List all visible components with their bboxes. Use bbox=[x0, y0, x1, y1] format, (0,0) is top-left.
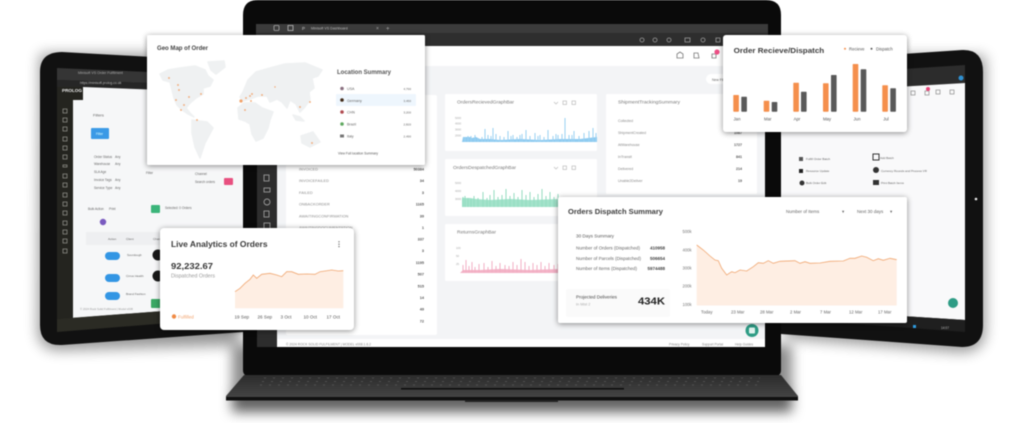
left tablet table: Client bbox=[126, 237, 134, 241]
month labels: Jan bbox=[734, 116, 741, 122]
location summary: CHN bbox=[347, 110, 355, 114]
left tablet logo: PROLOG bbox=[62, 88, 82, 93]
right tablet menu list bbox=[799, 154, 928, 186]
bar chart: dark series bbox=[741, 69, 896, 112]
panel: order statuses: FAILED bbox=[299, 191, 313, 195]
right tablet menu list: Bulk Order Edit bbox=[806, 181, 827, 185]
left tablet table bbox=[80, 219, 243, 311]
left tablet filter form: Invoice Tags bbox=[94, 178, 112, 182]
panel: returns graph: 25 bbox=[456, 262, 460, 266]
panel: orders dispatched graph: 5000 bbox=[455, 181, 462, 185]
line chart: dispatch: 200k bbox=[682, 284, 692, 288]
line chart: dispatch: 100k bbox=[682, 302, 692, 307]
month labels: Mar bbox=[764, 116, 772, 122]
laptop browser tab bar: × bbox=[376, 26, 379, 32]
dropdowns bbox=[786, 209, 893, 214]
line chart: dispatch: Today bbox=[701, 310, 713, 314]
panel: orders received graph: OrdersRecievedGraphBar bbox=[457, 100, 515, 104]
fulfilled legend: Fulfilled bbox=[178, 314, 194, 320]
laptop header icons bbox=[677, 49, 720, 58]
dropdowns: Number of Items bbox=[786, 209, 820, 214]
panel: order statuses: 3 bbox=[422, 249, 424, 253]
panel: shipment tracking summary: AtWarehouse bbox=[618, 143, 640, 147]
left tablet table: © 2024 Rock Solid Fulfilment | Model v008 bbox=[80, 307, 133, 311]
legend: Recieve bbox=[849, 46, 865, 51]
laptop footer: Support Portal bbox=[702, 342, 723, 346]
live chart dates: 10 Oct bbox=[304, 314, 318, 320]
panel: shipment tracking summary: ShipmentCreated bbox=[618, 131, 646, 135]
panel: shipment tracking summary: Unable2Deliver bbox=[618, 179, 643, 183]
location summary: 2,820 bbox=[403, 122, 411, 126]
panel: orders dispatched graph: 3000 bbox=[455, 197, 462, 201]
location summary: USA bbox=[347, 87, 355, 91]
legend bbox=[844, 46, 893, 51]
laptop bbox=[226, 0, 798, 402]
left tablet browser bars bbox=[57, 68, 243, 94]
left tablet table: Sourdough bbox=[127, 253, 142, 257]
right tablet screen bbox=[775, 83, 965, 320]
30 days summary: 506654 bbox=[650, 256, 665, 261]
reset button bbox=[224, 178, 233, 185]
panel: shipment tracking summary: Collected bbox=[618, 119, 633, 123]
right tablet header icons bbox=[911, 76, 964, 95]
fulfilled legend bbox=[172, 314, 194, 320]
panel: returns graph: ReturnsGraphBar bbox=[457, 230, 497, 234]
location summary: Brazil bbox=[347, 122, 356, 126]
panel: order statuses: 1 bbox=[422, 226, 424, 230]
left tablet filter form: SLA Age bbox=[94, 170, 106, 174]
location summary bbox=[336, 69, 416, 156]
month labels: May bbox=[823, 116, 832, 122]
location summary: Germany bbox=[347, 99, 362, 103]
panel: order statuses: 1195 bbox=[416, 261, 424, 265]
right tablet menu list: Resource Update bbox=[806, 169, 830, 173]
laptop footer: Help Guides bbox=[735, 342, 753, 346]
order chart title: Order Recieve/Dispatch bbox=[734, 46, 825, 55]
live chart dates: 3 Oct bbox=[280, 314, 292, 320]
left tablet filter form bbox=[88, 112, 233, 213]
dispatched orders value: Dispatched Orders bbox=[171, 274, 216, 280]
location summary: 4,790 bbox=[403, 87, 411, 91]
panel: orders dispatched graph: 4000 bbox=[455, 189, 462, 193]
laptop new filter pill: New Filter bbox=[712, 78, 728, 82]
right tablet taskbar: 14:07 bbox=[941, 326, 949, 330]
location summary: Italy bbox=[347, 134, 354, 138]
line chart: live orders bbox=[235, 270, 343, 308]
panel: order statuses: 1165 bbox=[416, 202, 424, 206]
panel: shipment tracking summary: 841 bbox=[736, 155, 742, 159]
location summary: 2,490 bbox=[403, 134, 411, 138]
month labels bbox=[734, 116, 889, 122]
line chart: dispatch: 500k bbox=[682, 229, 692, 234]
right tablet menu list: Currency Rounds and Process VR bbox=[881, 169, 928, 173]
30 days summary: Number of Items (Dispatched) bbox=[576, 266, 638, 271]
dropdowns: ▾ bbox=[890, 209, 893, 214]
panel: shipment tracking summary: 1727 bbox=[734, 143, 742, 147]
dispatched orders value: 92,232.67 bbox=[171, 261, 213, 271]
month labels: Jun bbox=[854, 116, 861, 122]
laptop footer: © 2024 ROCK SOLID FULFILMENT | MODEL v008.1.6.2 bbox=[286, 342, 371, 346]
panel: orders received graph: 4000 bbox=[455, 122, 462, 126]
dropdowns: Next 30 days bbox=[857, 209, 884, 214]
panel: shipment tracking summary: Delivered bbox=[618, 167, 633, 171]
laptop footer bbox=[286, 342, 753, 346]
line chart: dispatch: 400k bbox=[682, 248, 692, 252]
panel: orders received graph: 3000 bbox=[455, 128, 462, 132]
line chart: dispatch: 7 Mar bbox=[820, 310, 832, 314]
go button bbox=[151, 205, 160, 213]
right tablet camera dot bbox=[975, 198, 977, 200]
panel: orders received graph: 2000 bbox=[455, 134, 462, 138]
panel: order statuses: ONBACKORDER bbox=[299, 202, 330, 206]
left tablet browser bars: https://minisoft.prolog.co.uk bbox=[80, 81, 122, 85]
live chart dates bbox=[234, 314, 341, 320]
right tablet browser bars bbox=[781, 65, 965, 94]
world map bbox=[160, 61, 322, 158]
right tablet bbox=[775, 50, 983, 347]
line chart: dispatch: 28 Mar bbox=[760, 310, 774, 314]
line chart: dispatch: 12 Mar bbox=[849, 310, 863, 314]
panel: order statuses bbox=[286, 95, 437, 335]
projected deliveries bbox=[566, 289, 670, 317]
dispatch title: Orders Dispatch Summary bbox=[568, 207, 664, 216]
left tablet table: Brand Fashion bbox=[126, 292, 146, 296]
laptop chat button bbox=[746, 324, 758, 337]
right tablet chat button bbox=[948, 298, 958, 308]
right tablet menu list: Add Batch bbox=[880, 156, 894, 160]
panel: order statuses: 34 bbox=[420, 179, 425, 183]
panel: order statuses: 49 bbox=[420, 308, 424, 312]
left tablet body bbox=[40, 52, 243, 345]
left tablet table: Channel bbox=[153, 237, 165, 241]
left tablet browser bars: Minisoft VS Order Fulfilment bbox=[78, 71, 123, 75]
left tablet filter form: Any bbox=[115, 162, 121, 166]
panel: order statuses: 337 bbox=[418, 238, 424, 242]
left tablet filter form: Filter bbox=[146, 171, 154, 175]
left tablet filter form: Print bbox=[109, 207, 116, 211]
30 days summary: 30 Days Summary bbox=[576, 234, 615, 238]
panel: shipment tracking summary: 1087 bbox=[734, 131, 742, 135]
live chart dates: 19 Sep bbox=[234, 314, 250, 320]
month labels: Jul bbox=[883, 116, 889, 122]
left tablet filter form: Any bbox=[115, 186, 121, 190]
live chart dates: 17 Oct bbox=[326, 314, 341, 320]
line chart: dispatch: 2 Mar bbox=[790, 310, 802, 314]
left tablet sidebar bbox=[57, 87, 243, 332]
panel: order statuses: 507 bbox=[418, 272, 424, 276]
projected deliveries: Projected Deliveries bbox=[576, 294, 617, 300]
line chart: dispatch: 23 Mar bbox=[731, 310, 745, 314]
location summary: Location Summary bbox=[337, 69, 392, 76]
right tablet menu list: Fulfill Order Batch bbox=[806, 157, 830, 161]
30 days summary: 410958 bbox=[650, 246, 665, 250]
panel: returns graph: 100 bbox=[456, 246, 461, 250]
laptop footer: Privacy Policy bbox=[669, 342, 690, 346]
location summary: 3,200 bbox=[403, 110, 411, 114]
panel: order statuses: AWAITINGDOCUMENTATION bbox=[299, 226, 353, 230]
left tablet filter form: Channel bbox=[195, 172, 207, 176]
projected deliveries: In Mist 2 bbox=[576, 302, 590, 306]
panel: shipment tracking summary: 214 bbox=[736, 167, 742, 171]
left tablet filter form: Selected: 0 Orders bbox=[165, 206, 192, 210]
left tablet filter form: Bulk Action bbox=[88, 207, 104, 211]
left tablet screen bbox=[73, 87, 243, 318]
left tablet filter form: Service Type bbox=[94, 186, 113, 190]
bar chart: orange series bbox=[733, 64, 888, 112]
card: geo map of order bbox=[147, 35, 425, 165]
live analytics title: Live Analytics of Orders bbox=[171, 240, 268, 249]
location summary: View Full location Summary bbox=[338, 152, 378, 156]
laptop browser tab bar: Minisoft VS Dashboard bbox=[311, 26, 348, 30]
card: orders dispatch summary bbox=[558, 197, 907, 323]
shadow: laptop bbox=[232, 345, 792, 412]
panel: orders received graph bbox=[445, 94, 597, 151]
left tablet filter form: Search orders bbox=[195, 180, 215, 184]
panel: lower placeholder bbox=[606, 200, 757, 320]
left tablet filter form: Warehouse bbox=[94, 162, 110, 166]
30 days summary bbox=[576, 234, 665, 271]
month labels: Apr bbox=[794, 116, 801, 122]
panel: order statuses: 39 bbox=[420, 214, 424, 218]
laptop new filter pill bbox=[706, 74, 734, 84]
dropdowns: ▾ bbox=[842, 209, 845, 214]
left tablet filter form: Order Status bbox=[94, 155, 112, 159]
left tablet table: Action bbox=[108, 237, 117, 241]
panel: shipment tracking summary bbox=[606, 94, 757, 194]
left tablet filter form: Filters bbox=[93, 112, 104, 118]
panel: orders dispatched graph: OrdersDespatchedGraphBar bbox=[453, 165, 517, 170]
laptop sidebar bbox=[257, 46, 277, 347]
panel: order statuses: 50384 bbox=[413, 168, 425, 172]
legend: Dispatch bbox=[876, 46, 893, 51]
line chart: dispatch: 17 Mar bbox=[878, 310, 892, 314]
location summary: 3,450 bbox=[403, 99, 411, 103]
laptop browser tab bar: P bbox=[302, 26, 305, 31]
left tablet filter form: Any bbox=[115, 155, 121, 159]
panel: order statuses: 14 bbox=[420, 296, 425, 300]
left tablet table: Cirrus Health bbox=[126, 274, 144, 278]
panel: order statuses: 3 bbox=[422, 191, 424, 195]
laptop base bbox=[226, 375, 798, 402]
30 days summary: Number of Orders (Dispatched) bbox=[576, 246, 641, 250]
panel: order statuses: 515 bbox=[418, 284, 424, 288]
panel: orders received graph: 5000 bbox=[455, 116, 462, 120]
laptop browser tab bar: + bbox=[386, 26, 390, 32]
card: order recieve dispatch bbox=[723, 35, 907, 132]
panel: shipment tracking summary: InTransit bbox=[618, 155, 632, 159]
laptop lid bbox=[243, 0, 781, 376]
left tablet filter form: Filter bbox=[96, 132, 104, 136]
panel: shipment tracking summary: ShipmentTrackingSummary bbox=[618, 100, 681, 104]
right tablet body bbox=[781, 50, 983, 347]
panel: orders dispatched graph bbox=[445, 159, 597, 216]
line chart: dispatch: 300k bbox=[682, 266, 692, 270]
filter button bbox=[91, 128, 109, 139]
shadow: tablets bbox=[38, 54, 985, 352]
live chart dates: 26 Sep bbox=[258, 314, 273, 320]
dispatched orders value bbox=[171, 261, 216, 280]
panel: shipment tracking summary: 19 bbox=[738, 179, 742, 183]
laptop screen background bbox=[277, 46, 765, 347]
left tablet filter form: Any bbox=[115, 178, 121, 182]
30 days summary: 5974488 bbox=[647, 266, 665, 271]
panel: returns graph bbox=[445, 224, 597, 281]
30 days summary: Number of Parcels (Dispatched) bbox=[576, 256, 642, 261]
projected deliveries: 434K bbox=[638, 296, 665, 308]
panel: order statuses: INVOICEFAILED bbox=[299, 179, 329, 183]
panel: order statuses: AWAITINGCONFIRMATION bbox=[299, 214, 349, 218]
right tablet taskbar bbox=[775, 308, 965, 332]
panel: order statuses: INVOICED bbox=[299, 168, 318, 172]
left tablet bbox=[40, 52, 243, 345]
line chart: dispatch bbox=[682, 229, 897, 314]
menu dots bbox=[338, 241, 340, 247]
panel: returns graph: 50 bbox=[456, 254, 460, 258]
laptop browser tab bar bbox=[256, 24, 768, 46]
panel: order statuses: 72 bbox=[420, 320, 424, 324]
geo map title: Geo Map of Order bbox=[157, 45, 209, 52]
right tablet menu list: Print Batch Items bbox=[881, 181, 904, 185]
card: live analytics of orders bbox=[160, 228, 354, 330]
